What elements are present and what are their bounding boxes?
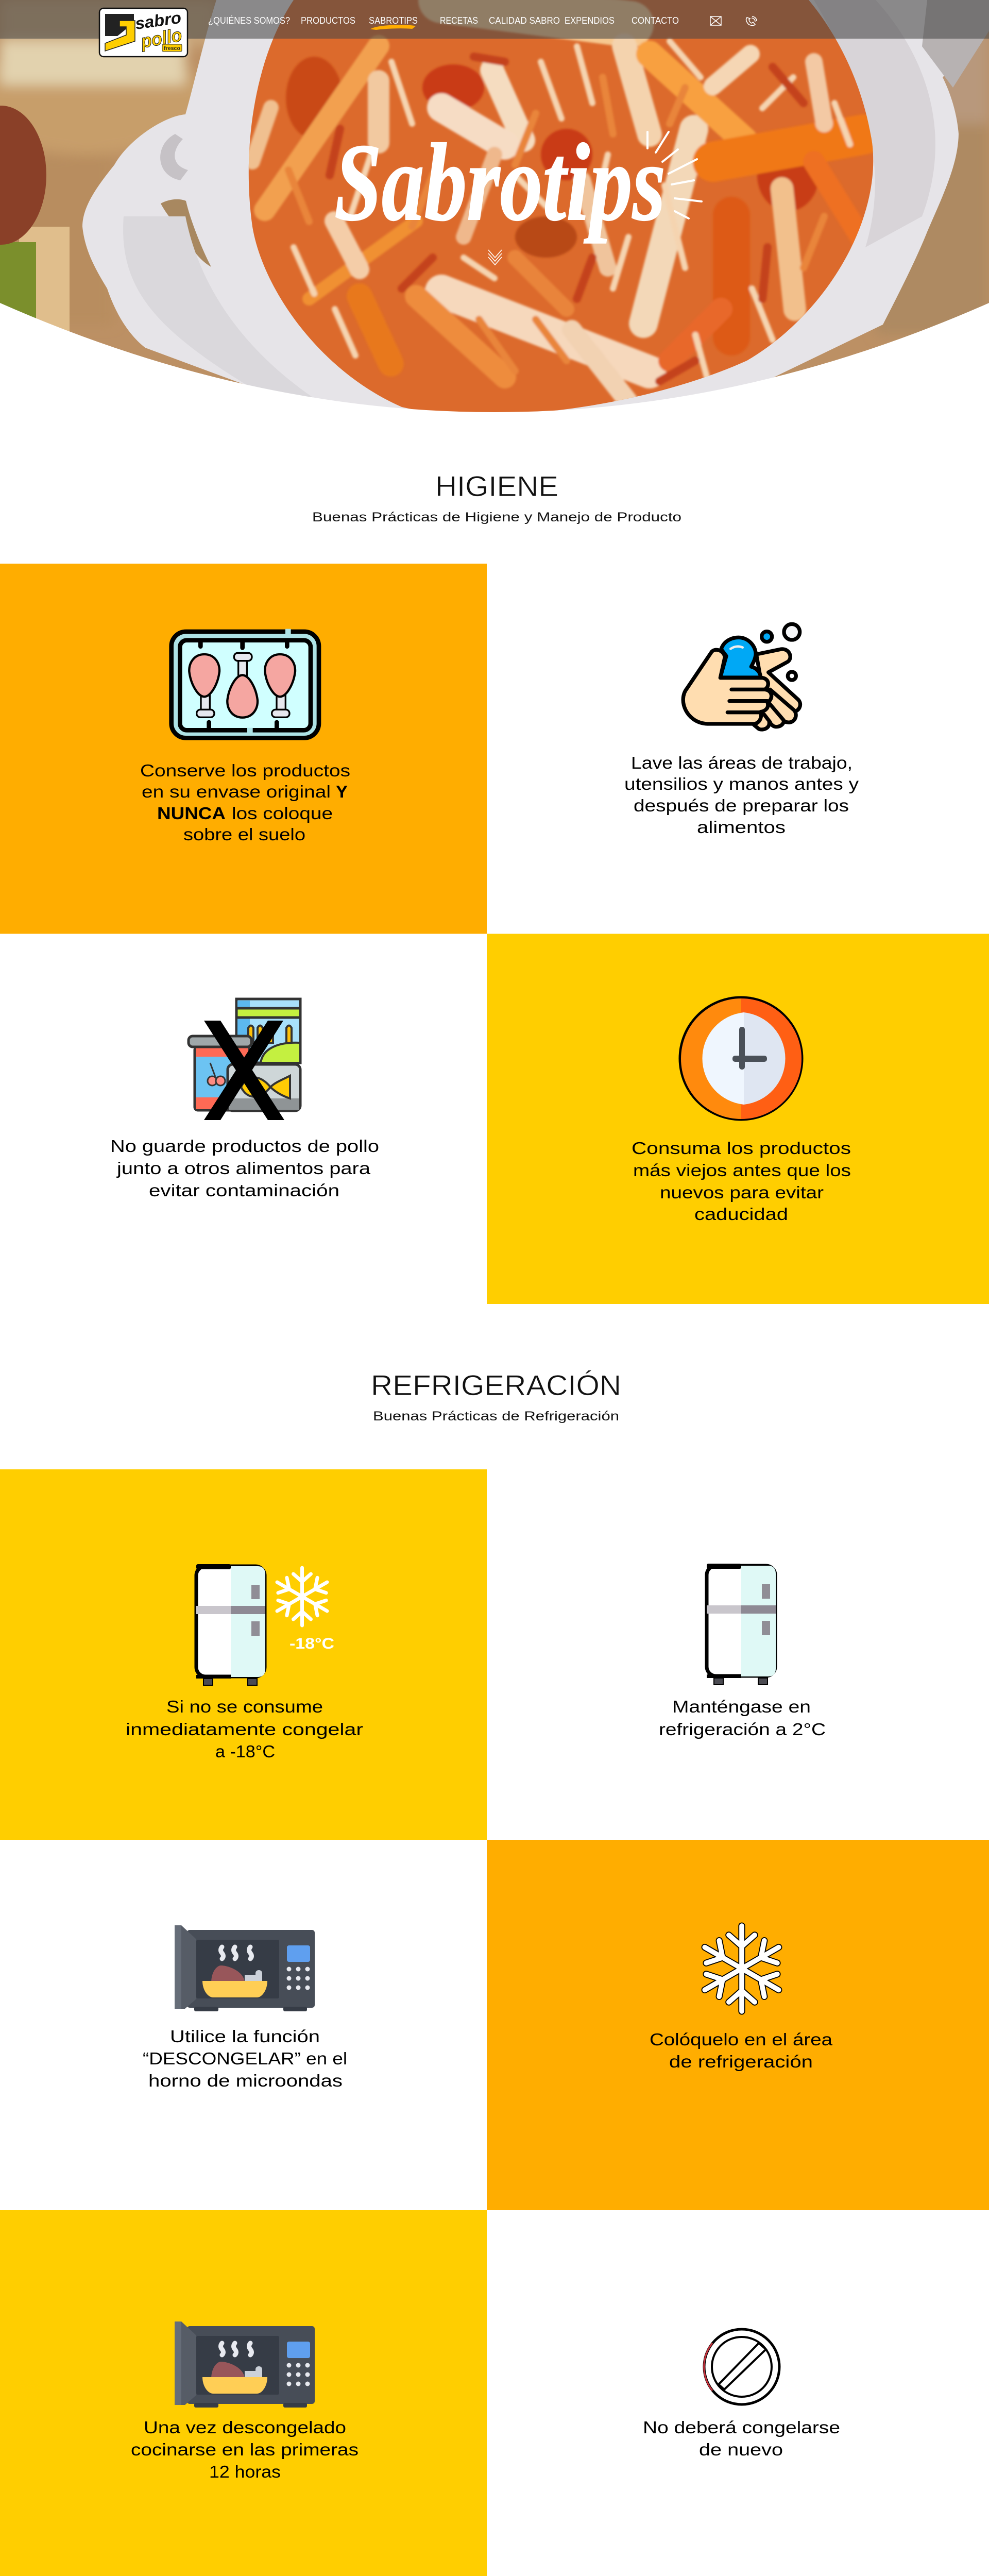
panel: congelar bbox=[0, 1469, 487, 1840]
nav links: SABROTIPS bbox=[369, 15, 418, 26]
text block: de nuevo bbox=[699, 2440, 783, 2459]
icon: snowflake bbox=[273, 1568, 331, 1625]
text block: Colóquelo en el área bbox=[650, 2030, 833, 2049]
text block bbox=[650, 2030, 833, 2071]
text block: cocinarse en las primeras bbox=[131, 2440, 359, 2459]
logo: sabro bbox=[134, 8, 182, 33]
text block bbox=[659, 1697, 826, 1739]
icon: prohibited sign bbox=[704, 2329, 779, 2404]
text block: los coloque bbox=[232, 804, 333, 823]
nav links: RECETAS bbox=[440, 15, 478, 26]
text block: Una vez descongelado bbox=[144, 2418, 346, 2437]
text block bbox=[126, 1697, 363, 1761]
panel: colocar bbox=[487, 1840, 989, 2210]
text block: más viejos antes que los bbox=[633, 1161, 851, 1180]
panel: conserve bbox=[0, 564, 487, 934]
heading: higiene: Buenas Prácticas de Higiene y Manejo de Producto bbox=[312, 510, 681, 524]
icon: crossed-out food cans bbox=[189, 999, 300, 1120]
sparkle rays bbox=[647, 132, 702, 218]
text block: a -18°C bbox=[215, 1742, 275, 1761]
logo bbox=[99, 8, 187, 57]
icon: microwave bbox=[175, 1925, 315, 2011]
text block: Lave las áreas de trabajo, bbox=[631, 753, 852, 772]
nav links: PRODUCTOS bbox=[301, 15, 355, 26]
icon: phone bbox=[746, 16, 757, 25]
text block: No guarde productos de pollo bbox=[110, 1137, 379, 1156]
panel: descongelar bbox=[0, 1840, 487, 2210]
text block: 12 horas bbox=[209, 2462, 281, 2481]
text block: Consuma los productos bbox=[632, 1139, 851, 1158]
hero photo bbox=[0, 0, 989, 428]
text block: “DESCONGELAR” en el bbox=[143, 2049, 347, 2068]
text block bbox=[140, 761, 350, 844]
icon: washing hands bbox=[683, 624, 800, 730]
text block: Si no se consume bbox=[166, 1697, 323, 1716]
shredded chicken filling bbox=[227, 0, 896, 422]
panel: mantener bbox=[487, 1469, 989, 1840]
text block: después de preparar los bbox=[634, 796, 849, 815]
nav links: CONTACTO bbox=[632, 15, 679, 26]
icon: snowflake bbox=[698, 1926, 785, 2011]
text block: en su envase original bbox=[142, 782, 331, 801]
text block bbox=[643, 2418, 840, 2459]
icon: microwave bbox=[175, 2321, 315, 2408]
text block: Utilice la función bbox=[170, 2027, 320, 2046]
bowl bbox=[82, 0, 989, 428]
logo: pollo bbox=[139, 24, 183, 52]
text block: NUNCA bbox=[157, 804, 226, 823]
text block bbox=[110, 1137, 379, 1200]
nav links: EXPENDIOS bbox=[565, 15, 615, 26]
temperature label: -18°C bbox=[289, 1635, 334, 1652]
heading: refrigeracion: Buenas Prácticas de Refrigeración bbox=[373, 1409, 619, 1423]
text block bbox=[632, 1139, 851, 1224]
scroll arrow bbox=[488, 250, 502, 265]
active underline bbox=[372, 25, 415, 29]
hero curve bbox=[0, 303, 989, 428]
panel: no guardar bbox=[0, 934, 487, 1304]
text block: Manténgase en bbox=[672, 1697, 811, 1716]
nav links: ¿QUIÉNES SOMOS? bbox=[208, 15, 290, 26]
text block: Conserve los productos bbox=[140, 761, 350, 780]
icon: fridge bbox=[707, 1564, 776, 1685]
icon: chicken tray bbox=[172, 629, 319, 738]
text block: evitar contaminación bbox=[149, 1181, 339, 1200]
text block: No deberá congelarse bbox=[643, 2418, 840, 2437]
panel: no congelar bbox=[487, 2210, 989, 2576]
spoon bbox=[0, 106, 70, 335]
text block: alimentos bbox=[697, 818, 786, 837]
nav bar bbox=[0, 0, 989, 39]
text block: caducidad bbox=[694, 1205, 788, 1224]
text block: Y bbox=[336, 782, 348, 801]
text block: sobre el suelo bbox=[183, 825, 305, 844]
X mark bbox=[204, 1021, 284, 1120]
icon: fridge bbox=[196, 1564, 265, 1685]
heading: higiene bbox=[312, 470, 681, 524]
text block: nuevos para evitar bbox=[660, 1183, 824, 1202]
panel: cocinarse bbox=[0, 2210, 487, 2576]
text block: inmediatamente congelar bbox=[126, 1720, 363, 1739]
heading: refrigeracion bbox=[371, 1369, 621, 1423]
text block bbox=[143, 2027, 347, 2090]
icon: mail bbox=[710, 16, 721, 25]
heading: refrigeracion: REFRIGERACIÓN bbox=[371, 1369, 621, 1401]
heading: higiene: HIGIENE bbox=[435, 470, 558, 502]
text block: horno de microondas bbox=[148, 2071, 343, 2090]
panel: consumir bbox=[487, 934, 989, 1304]
panel: lavar bbox=[487, 564, 989, 934]
icon: clock bbox=[679, 996, 804, 1121]
logo: fresco bbox=[164, 46, 180, 52]
hero title: Sabrotips bbox=[334, 121, 666, 244]
text block bbox=[131, 2418, 359, 2481]
nav links bbox=[208, 15, 679, 26]
text block: de refrigeración bbox=[669, 2052, 813, 2071]
nav links: CALIDAD SABRO bbox=[489, 15, 560, 26]
text block bbox=[624, 753, 859, 837]
text block: junto a otros alimentos para bbox=[116, 1159, 371, 1178]
text block: utensilios y manos antes y bbox=[624, 774, 859, 793]
text block: refrigeración a 2°C bbox=[659, 1720, 826, 1739]
